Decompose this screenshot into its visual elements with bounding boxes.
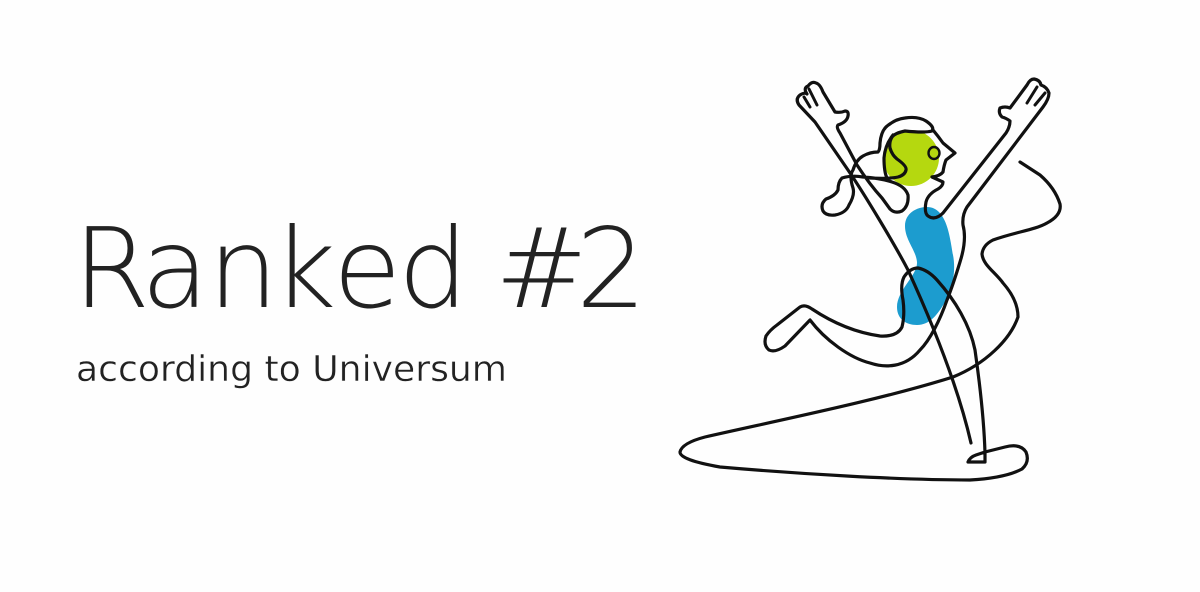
- line drawing: face, right arm and body: [680, 79, 1060, 480]
- head colour circle: [883, 130, 939, 186]
- title: Ranked #2: [73, 205, 647, 334]
- fingers: [804, 87, 1045, 107]
- torso colour blob: [897, 207, 954, 325]
- eye: [928, 147, 940, 159]
- subtitle: according to Universum: [76, 349, 507, 390]
- illustration: running figure: [680, 79, 1060, 480]
- line drawing: arm, hair and ribbon: [797, 82, 971, 443]
